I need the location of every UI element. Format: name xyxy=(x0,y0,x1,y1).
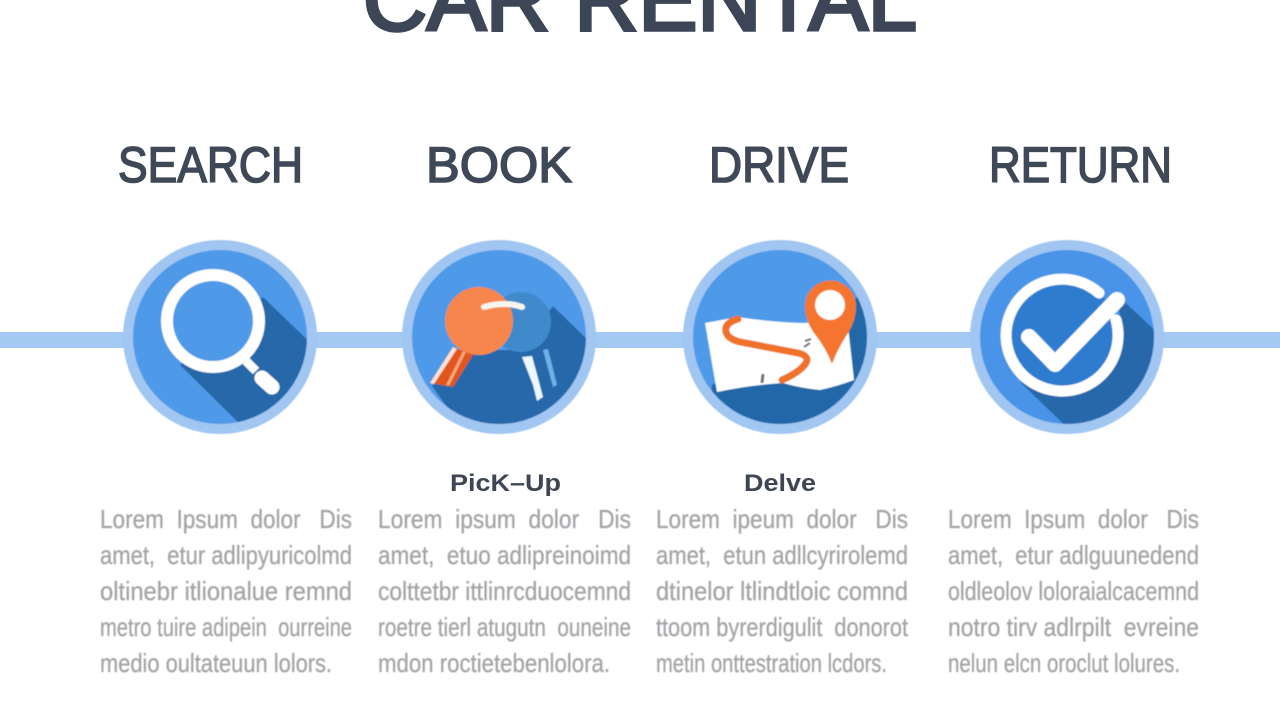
description: drive: ttoom byrerdigulit donorot xyxy=(656,612,909,642)
heading: drive: DRIVE xyxy=(709,137,849,193)
description: drive: dtinelor ltlindtloic comnd xyxy=(656,576,908,606)
description: drive: metin onttestration lcdors. xyxy=(656,648,887,678)
description: search: Lorem Ipsum dolor Dis xyxy=(100,504,352,534)
description: drive: amet, etun adllcyrirolemd xyxy=(656,540,908,570)
description: search xyxy=(100,504,352,678)
heading: book: BOOK xyxy=(426,137,572,193)
heading: return: RETURN xyxy=(989,137,1172,193)
subheading: pick-up: PicK–Up xyxy=(450,470,561,497)
description: return: oldleolov loloraialcacemnd xyxy=(948,576,1199,606)
description: drive xyxy=(656,504,909,678)
icon: car keys xyxy=(402,240,600,440)
description: return: Lorem Ipsum dolor Dis xyxy=(948,504,1199,534)
description: book: mdon roctietebenlolora. xyxy=(378,648,610,678)
description: book: Lorem ipsum dolor Dis xyxy=(378,504,631,534)
timeline connector line xyxy=(0,332,1280,348)
description: book: colttetbr ittlinrcduocemnd xyxy=(378,576,631,606)
description: drive: Lorem ipeum dolor Dis xyxy=(656,504,908,534)
panel: book step xyxy=(378,137,631,678)
description: return xyxy=(948,504,1199,678)
description: search: metro tuire adipein ourreine xyxy=(100,612,352,642)
icon: check mark xyxy=(970,240,1172,440)
description: search: amet, etur adlipyuricolmd xyxy=(100,540,352,570)
description: return: notro tirv adlrpilt evreine xyxy=(948,612,1199,642)
icon: map and location pin xyxy=(683,240,880,440)
heading: search: SEARCH xyxy=(118,137,303,193)
description: return: amet, etur adlguunedend xyxy=(948,540,1199,570)
description: search: medio oultateuun lolors. xyxy=(100,648,332,678)
description: book: roetre tierl atugutn ouneine xyxy=(378,612,631,642)
description: search: oltinebr itlionalue remnd xyxy=(100,576,352,606)
subheading: delve: Delve xyxy=(744,470,816,497)
icon: magnifying glass xyxy=(123,240,320,440)
panel: return step xyxy=(948,137,1199,678)
panel: drive step xyxy=(656,137,909,678)
description: book xyxy=(378,504,631,678)
description: book: amet, etuo adlipreinoimd xyxy=(378,540,631,570)
panel: search step xyxy=(100,137,352,678)
description: return: nelun elcn oroclut lolures. xyxy=(948,648,1180,678)
